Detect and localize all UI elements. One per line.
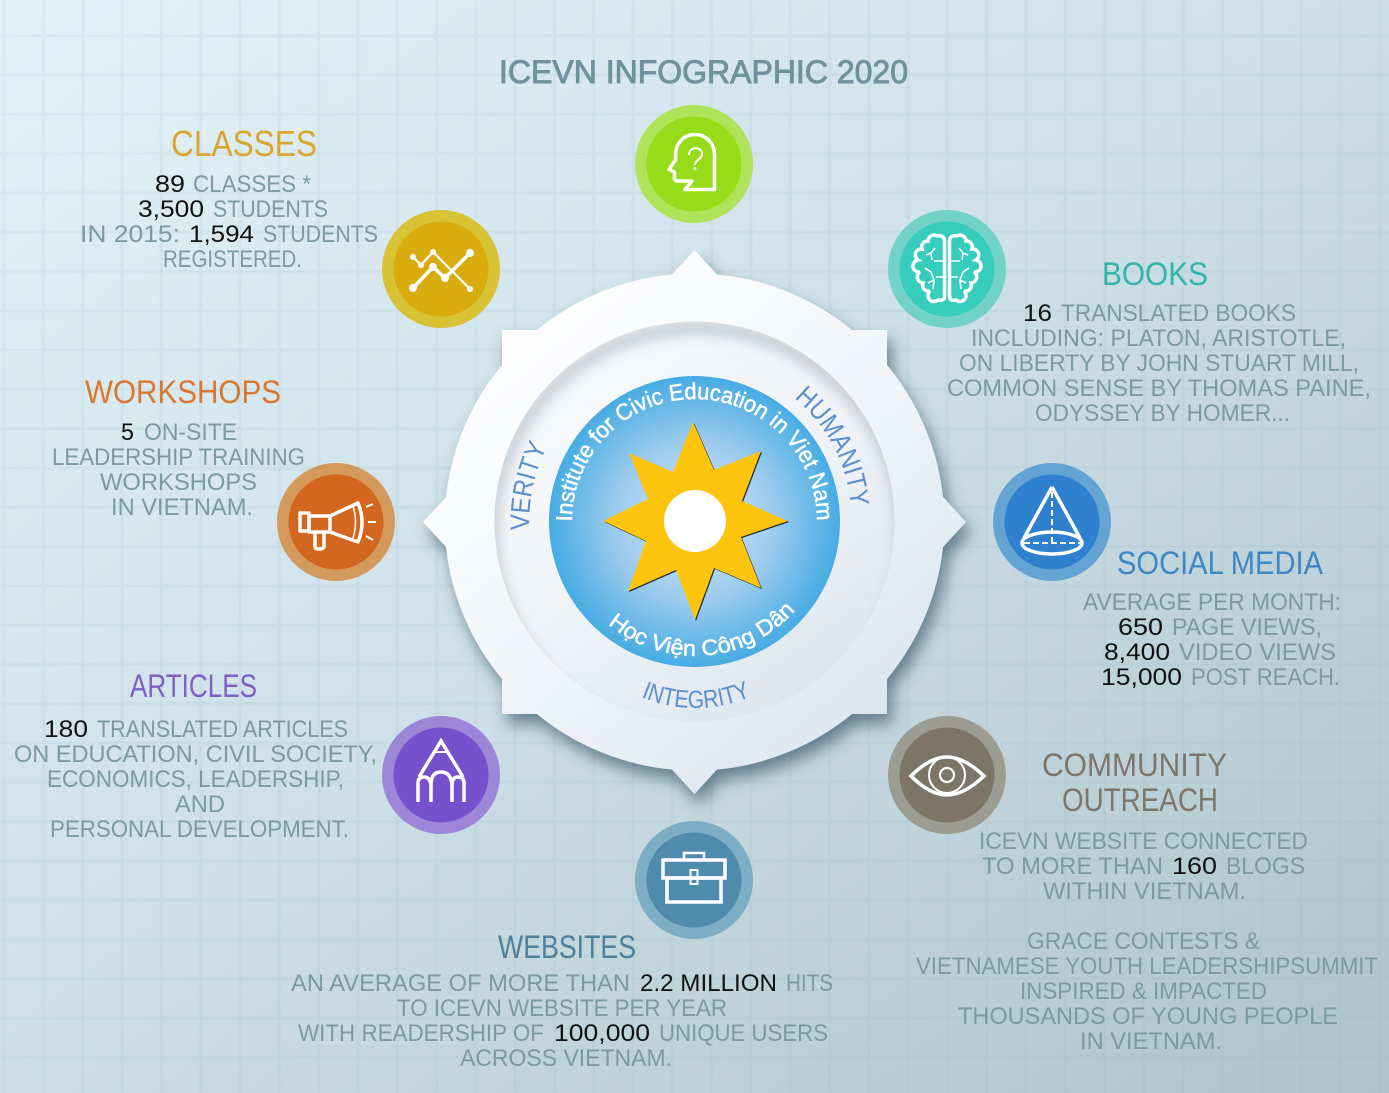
value: verity: VERITY (510, 440, 544, 530)
text: books details: INCLUDING: PLATON, ARISTOTLE, (971, 325, 1346, 352)
text: books details: TRANSLATED BOOKS (1061, 300, 1296, 327)
text: social media details: 650 (1118, 614, 1163, 641)
text: social media details: POST REACH. (1191, 664, 1340, 691)
icon: head with question mark (635, 105, 753, 223)
text: articles details: AND (175, 791, 225, 818)
text: workshops details: IN VIETNAM. (111, 494, 253, 521)
text: books details (947, 300, 1371, 427)
text: classes details: IN 2015: (80, 221, 180, 248)
heading: articles: ARTICLES (130, 668, 257, 704)
icon: pencil (382, 716, 500, 834)
heading: community outreach (1042, 747, 1227, 818)
logo: blue circle (549, 376, 840, 667)
text: social media details: AVERAGE PER MONTH: (1083, 589, 1341, 616)
text: contests and summit: GRACE CONTESTS & (1027, 928, 1260, 955)
text: websites details: 2.2 MILLION (640, 970, 777, 997)
heading: community outreach: OUTREACH (1062, 782, 1218, 818)
text: websites details: TO ICEVN WEBSITE PER YEAR (397, 995, 727, 1022)
text: articles details (14, 716, 377, 843)
text: website connections: ICEVN WEBSITE CONNECTED (979, 828, 1308, 855)
panel: books (947, 256, 1371, 427)
text: articles details: PERSONAL DEVELOPMENT. (50, 816, 349, 843)
logo text: vietnamese name: Học Viện Công Dân (609, 604, 795, 658)
panel: articles (14, 668, 377, 843)
text: contests and summit: THOUSANDS OF YOUNG PEOPLE (958, 1003, 1338, 1030)
heading: workshops: WORKSHOPS (85, 374, 281, 410)
icon: megaphone (277, 463, 395, 581)
text: contests and summit: INSPIRED & IMPACTED (1020, 978, 1267, 1005)
text: social media details: PAGE VIEWS, (1172, 614, 1322, 641)
text: books details: 16 (1023, 300, 1052, 327)
text: books details: COMMON SENSE BY THOMAS PAINE, (947, 375, 1371, 402)
text: classes details: CLASSES * (193, 171, 311, 198)
text: classes details: REGISTERED. (163, 246, 302, 273)
panel: websites (291, 929, 833, 1072)
text: website connections: TO MORE THAN (982, 853, 1163, 880)
text: classes details: STUDENTS (263, 221, 378, 248)
text: websites details: AN AVERAGE OF MORE THAN (291, 970, 630, 997)
icon: eye (888, 716, 1006, 834)
heading: websites: WEBSITES (498, 929, 636, 965)
text: websites details: WITH READERSHIP OF (298, 1020, 544, 1047)
text: website connections: BLOGS (1226, 853, 1305, 880)
panel: workshops (52, 374, 305, 521)
text: workshops details: WORKSHOPS (100, 469, 257, 496)
heading: books: BOOKS (1102, 256, 1208, 292)
outer star-disc (423, 250, 966, 794)
text: workshops details: LEADERSHIP TRAINING (52, 444, 305, 471)
text: articles details: ECONOMICS, LEADERSHIP, (47, 766, 344, 793)
central emblem (420, 250, 978, 810)
text: contests and summit (916, 928, 1378, 1055)
text: websites details: ACROSS VIETNAM. (460, 1045, 672, 1072)
text: contests and summit: IN VIETNAM. (1080, 1028, 1222, 1055)
text: books details: ON LIBERTY BY JOHN STUART MILL, (959, 350, 1359, 377)
text: social media details: VIDEO VIEWS (1179, 639, 1336, 666)
text: social media details: 15,000 (1101, 664, 1182, 691)
text: social media details: 8,400 (1104, 639, 1170, 666)
panel: social media (1083, 545, 1341, 691)
text: website connections: 160 (1172, 853, 1217, 880)
text: classes details: 89 (155, 171, 185, 198)
text: workshops details: 5 (121, 419, 134, 446)
text: classes details (80, 171, 378, 273)
text: website connections: WITHIN VIETNAM. (1043, 878, 1246, 905)
text: articles details: ON EDUCATION, CIVIL SOCIETY, (14, 741, 377, 768)
panel: community outreach (916, 747, 1378, 1055)
text: classes details: STUDENTS (213, 196, 328, 223)
text: websites details (291, 970, 833, 1072)
text: articles details: TRANSLATED ARTICLES (97, 716, 348, 743)
text: websites details: HITS (786, 970, 833, 997)
icon: briefcase (635, 821, 753, 939)
inner recessed disc (494, 322, 894, 698)
text: website connections (979, 828, 1308, 905)
icon: brain (888, 210, 1006, 328)
text: books details: ODYSSEY BY HOMER... (1035, 400, 1290, 427)
text: classes details: 1,594 (189, 221, 254, 248)
panel: classes (80, 123, 378, 273)
logo text: institute name: Institute for Civic Education in Viet Nam (556, 382, 830, 520)
heading: social media: SOCIAL MEDIA (1117, 545, 1324, 581)
text: social media details (1083, 589, 1341, 691)
text: classes details: 3,500 (138, 196, 204, 223)
icon: cone (993, 463, 1111, 581)
text: websites details: 100,000 (554, 1020, 650, 1047)
text: websites details: UNIQUE USERS (659, 1020, 828, 1047)
logo: star (604, 422, 789, 621)
text: workshops details (52, 419, 305, 521)
heading: classes: CLASSES (171, 123, 317, 164)
text: articles details: 180 (44, 716, 88, 743)
icon: line chart (382, 210, 500, 328)
value: integrity: INTEGRITY (642, 680, 746, 708)
heading: community outreach: COMMUNITY (1042, 747, 1227, 783)
value: humanity: HUMANITY (796, 385, 870, 504)
title: ICEVN INFOGRAPHIC 2020 (499, 54, 908, 90)
text: workshops details: ON-SITE (144, 419, 237, 446)
